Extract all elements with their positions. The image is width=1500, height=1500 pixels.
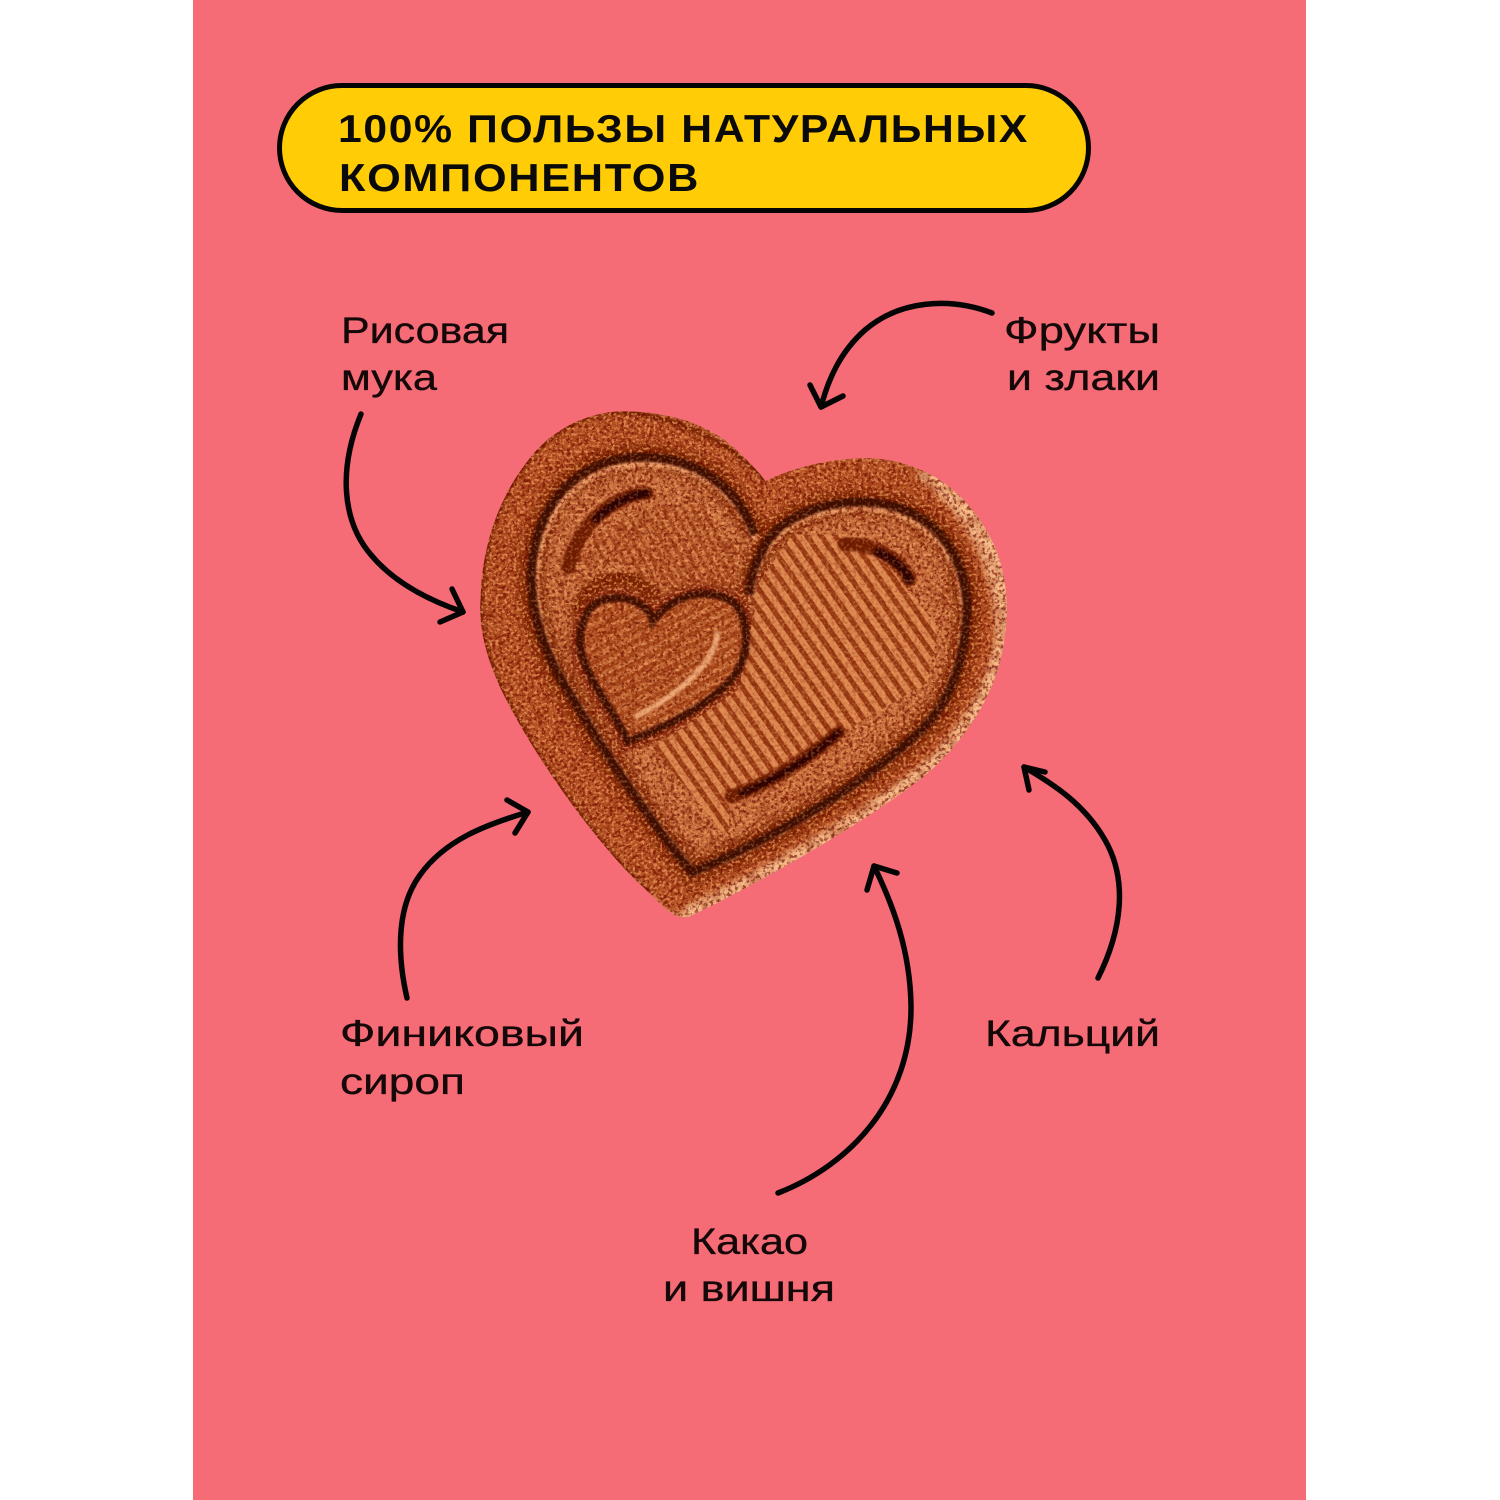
arrow: cocoa and cherry <box>778 866 911 1193</box>
label: rice flour <box>341 310 509 398</box>
label: fruits and cereals: Фрукты <box>1004 310 1160 351</box>
inner panel <box>531 457 967 872</box>
arrow: calcium <box>1024 767 1119 978</box>
groove line <box>531 457 967 872</box>
groove glow <box>531 457 967 872</box>
hatching left <box>582 504 738 586</box>
mottling <box>484 412 1006 916</box>
slot bottom <box>731 733 839 796</box>
label: cocoa and cherry: и вишня <box>663 1268 835 1309</box>
label: cocoa and cherry <box>663 1221 835 1309</box>
small heart fill <box>580 594 746 741</box>
arrow: fruits and cereals <box>810 303 992 407</box>
label: calcium: Кальций <box>985 1013 1160 1054</box>
label: fruits and cereals <box>1004 310 1160 398</box>
badge pill <box>280 86 1088 210</box>
hatching right <box>653 534 938 838</box>
light grain <box>480 411 1006 918</box>
fine dark grain <box>482 412 1007 918</box>
light rim <box>689 469 1006 917</box>
groove highlight <box>535 464 964 873</box>
small heart arc shadow <box>578 579 656 614</box>
background panel <box>193 0 1306 1500</box>
cookie base <box>480 411 1007 917</box>
cookie body <box>475 407 1002 913</box>
label: date syrup: сироп <box>340 1061 465 1102</box>
label: date syrup <box>340 1013 584 1102</box>
dark grain <box>480 411 1007 918</box>
edge shading <box>480 411 765 893</box>
title text: 100% ПОЛЬЗЫ НАТУРАЛЬНЫХ <box>338 108 1029 151</box>
small heart rim <box>635 631 717 717</box>
arrow: rice flour <box>346 414 463 622</box>
label: rice flour: мука <box>341 357 437 398</box>
small heart halo <box>580 594 746 741</box>
slot top left <box>568 493 646 567</box>
heart cookie <box>480 411 1007 918</box>
infographic canvas <box>193 0 1306 1500</box>
label: cocoa and cherry: Какао <box>691 1221 808 1262</box>
small heart hatching <box>584 596 742 734</box>
title text <box>338 108 1029 200</box>
slot top right <box>845 544 909 579</box>
title badge <box>280 86 1088 210</box>
label: fruits and cereals: и злаки <box>1007 357 1160 398</box>
label: date syrup: Финиковый <box>340 1013 584 1054</box>
arrow: date syrup <box>400 800 528 998</box>
label: rice flour: Рисовая <box>341 310 509 351</box>
fine light grain <box>480 412 1006 917</box>
title text: КОМПОНЕНТОВ <box>339 157 700 200</box>
small heart groove <box>580 594 746 741</box>
